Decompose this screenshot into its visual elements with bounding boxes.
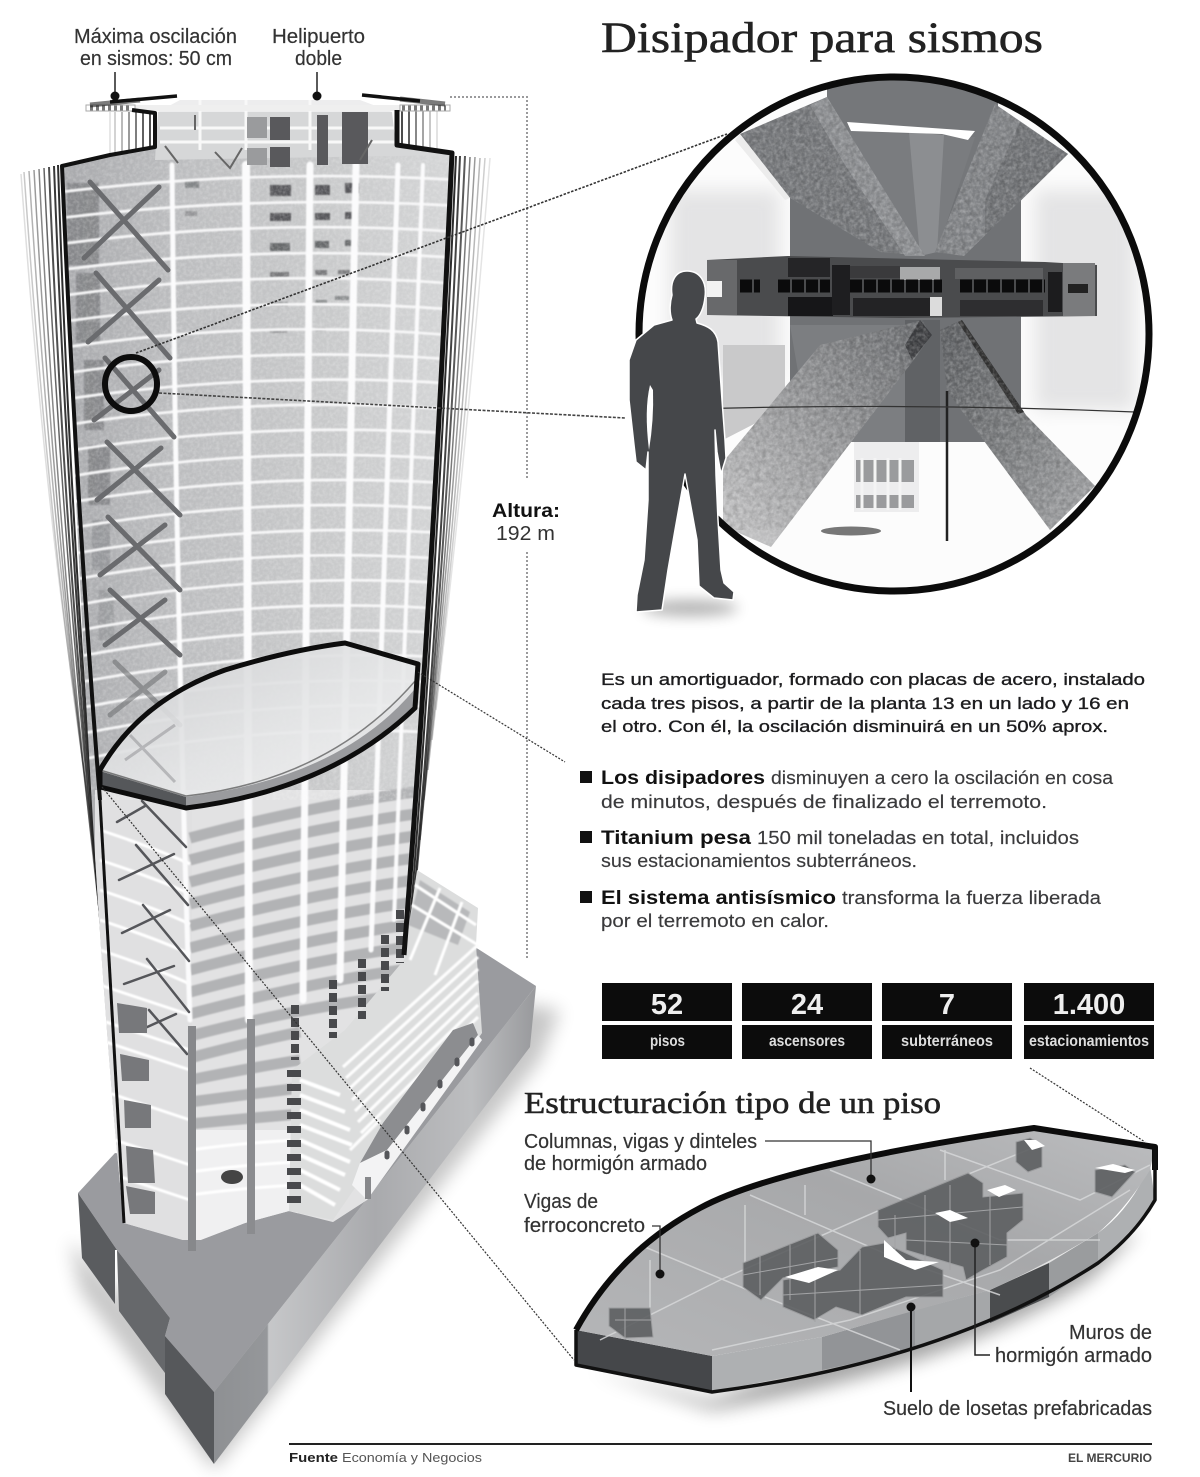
footer: [289, 1444, 1152, 1465]
white voids: [785, 1140, 1135, 1283]
bullet: Titanium: [580, 828, 1079, 871]
label: muros: hormigón armado: [995, 1345, 1152, 1367]
bullet: disipadores: Los disipadores: [601, 768, 765, 789]
footer: Economía y Negocios: [342, 1450, 483, 1465]
label: vigas: ferroconcreto: [524, 1215, 645, 1237]
connector to floor plan left: [102, 787, 574, 1360]
bullet: Titanium: Titanium pesa: [601, 828, 752, 849]
plan side faces: [576, 1165, 1155, 1392]
plan shadow: [590, 1230, 1140, 1410]
photo background haze: [670, 190, 1135, 410]
grey patches: [117, 1003, 155, 1214]
label: muros: [970, 1238, 1152, 1367]
label: columnas: [524, 1131, 876, 1184]
label: columnas: Columnas, vigas y dinteles: [524, 1131, 757, 1153]
dark core windows: [185, 180, 359, 333]
floor disc highlighted: [100, 643, 418, 808]
height label: [492, 501, 560, 545]
stat: pisos: pisos: [650, 1033, 685, 1050]
description paragraph: [601, 670, 1145, 736]
connector to text: [418, 672, 565, 762]
upper panel: [884, 188, 958, 246]
label: muros: Muros de: [1069, 1322, 1152, 1344]
photo ring: [639, 77, 1149, 591]
label: maximum oscillation: [74, 26, 237, 100]
speckle overlays on beams only: [723, 98, 1095, 546]
bullet: sistema: por el terremoto en calor.: [601, 911, 829, 931]
dark studs: [387, 1040, 472, 1157]
tower black outline: [62, 95, 452, 1223]
distant building left: [723, 345, 785, 440]
stat: pisos: [602, 983, 732, 1059]
central pillar: [790, 188, 1021, 442]
dark panels left: [67, 183, 114, 640]
dark slab band: [360, 1023, 478, 1163]
tower ghost oscillation lines, right: [408, 156, 490, 950]
upper right beam: [935, 104, 1068, 256]
description paragraph: Es un amortiguador, formado con placas de acero, instalado: [601, 670, 1145, 689]
pole, wire, manhole: [946, 391, 948, 541]
stat: ascensores: ascensores: [769, 1033, 845, 1050]
wall grid lines: [615, 1185, 1023, 1338]
concrete base: [78, 947, 536, 1464]
lower panel tones: [790, 325, 905, 442]
podium: [289, 870, 482, 1220]
label: double helipad: [272, 26, 365, 100]
stat: estacionamientos: 1.400: [1053, 989, 1125, 1021]
stat: subterraneos: 7: [939, 989, 955, 1021]
stat: estacionamientos: [1024, 983, 1154, 1059]
label: columnas: de hormigón armado: [524, 1153, 707, 1175]
dotted connector to photo bottom: [159, 393, 625, 418]
stat: ascensores: [742, 983, 872, 1059]
footer: EL MERCURIO: [1068, 1451, 1152, 1465]
height dimension line: [450, 97, 527, 958]
person ground shadow: [642, 600, 738, 616]
description paragraph: cada tres pisos, a partir de la planta 13 en un lado y 16 en: [601, 694, 1129, 713]
floor plan heading: Estructuración tipo de un piso: [524, 1085, 941, 1120]
ground floor detail: [221, 1170, 243, 1184]
title: Disipador para sismos: [601, 15, 1043, 62]
tower ghost oscillation lines, left: [21, 165, 122, 1180]
bullet: sistema: transforma la fuerza liberada: [842, 888, 1102, 908]
bullet: Titanium: 150 mil toneladas en total, incluidos: [757, 828, 1079, 848]
plan outlines: [576, 1128, 1155, 1330]
podium top grid: [408, 880, 478, 975]
floor slabs lower: [190, 792, 415, 1124]
connector to floor plan right: [1030, 1068, 1145, 1142]
bullet: disipadores: de minutos, después de finalizado el terremoto.: [601, 792, 1047, 812]
damper ring: [707, 256, 1097, 318]
bullet: Titanium: sus estacionamientos subterráneos.: [601, 851, 917, 871]
tower body: [50, 140, 470, 1240]
X braces lower: [117, 801, 189, 1054]
diagonal white stripes: [343, 945, 478, 1150]
chevron stripes beside beads: [300, 1080, 352, 1205]
columns at tower foot: [188, 910, 400, 1251]
floor slabs upper: [60, 176, 460, 764]
bullet: sistema: [580, 888, 1102, 931]
helipad roof: [155, 100, 452, 168]
white edge: [352, 1035, 482, 1200]
stat: subterraneos: subterráneos: [901, 1033, 993, 1050]
tower illustration: [21, 95, 727, 1470]
description paragraph: el otro. Con él, la oscilación disminuirá en un 50% aprox.: [601, 717, 1108, 736]
neck ghost lines: [110, 110, 437, 154]
bullet: sistema: El sistema antisísmico: [601, 888, 836, 909]
photo of damper in circle: [639, 70, 1149, 591]
lower left beam: [723, 320, 930, 547]
mottled texture: [60, 150, 460, 800]
bullet: disipadores: disminuyen a cero la oscilación en cosa: [771, 768, 1114, 788]
helipad deck rim: [86, 105, 450, 111]
top strip: [847, 122, 975, 140]
label: maximum oscillation: Máxima oscilación: [74, 26, 237, 48]
label: vigas: Vigas de: [524, 1191, 598, 1213]
X braces upper: [84, 182, 180, 725]
core walls: [609, 1138, 1135, 1338]
bullet: disipadores: [580, 768, 1114, 812]
stat: estacionamientos: estacionamientos: [1029, 1033, 1149, 1050]
beam lines: [600, 1145, 1150, 1350]
label: double helipad: Helipuerto: [272, 26, 365, 48]
lower right beam: [940, 320, 1095, 530]
person silhouette: [629, 271, 738, 616]
label: suelo: Suelo de losetas prefabricadas: [883, 1398, 1152, 1420]
label: vigas: [524, 1191, 664, 1278]
upper left beam: [740, 97, 827, 198]
label: maximum oscillation: en sismos: 50 cm: [80, 48, 232, 70]
stat: pisos: 52: [651, 989, 683, 1021]
stat: subterraneos: [882, 983, 1012, 1059]
white columns: [172, 165, 423, 1020]
floor plan illustration: [576, 1128, 1155, 1410]
soft shadow under base: [70, 1000, 560, 1470]
label: suelo: [883, 1302, 1152, 1420]
height label: Altura:: [492, 501, 560, 522]
circle marker on brace: [105, 357, 157, 411]
plan floor top: [576, 1128, 1155, 1356]
footer: Fuente: [289, 1450, 338, 1465]
distant building: [854, 442, 919, 512]
label: double helipad: doble: [295, 48, 342, 70]
height label: 192 m: [496, 523, 555, 545]
stat: ascensores: 24: [791, 989, 823, 1021]
dotted connector to photo top: [136, 134, 727, 353]
